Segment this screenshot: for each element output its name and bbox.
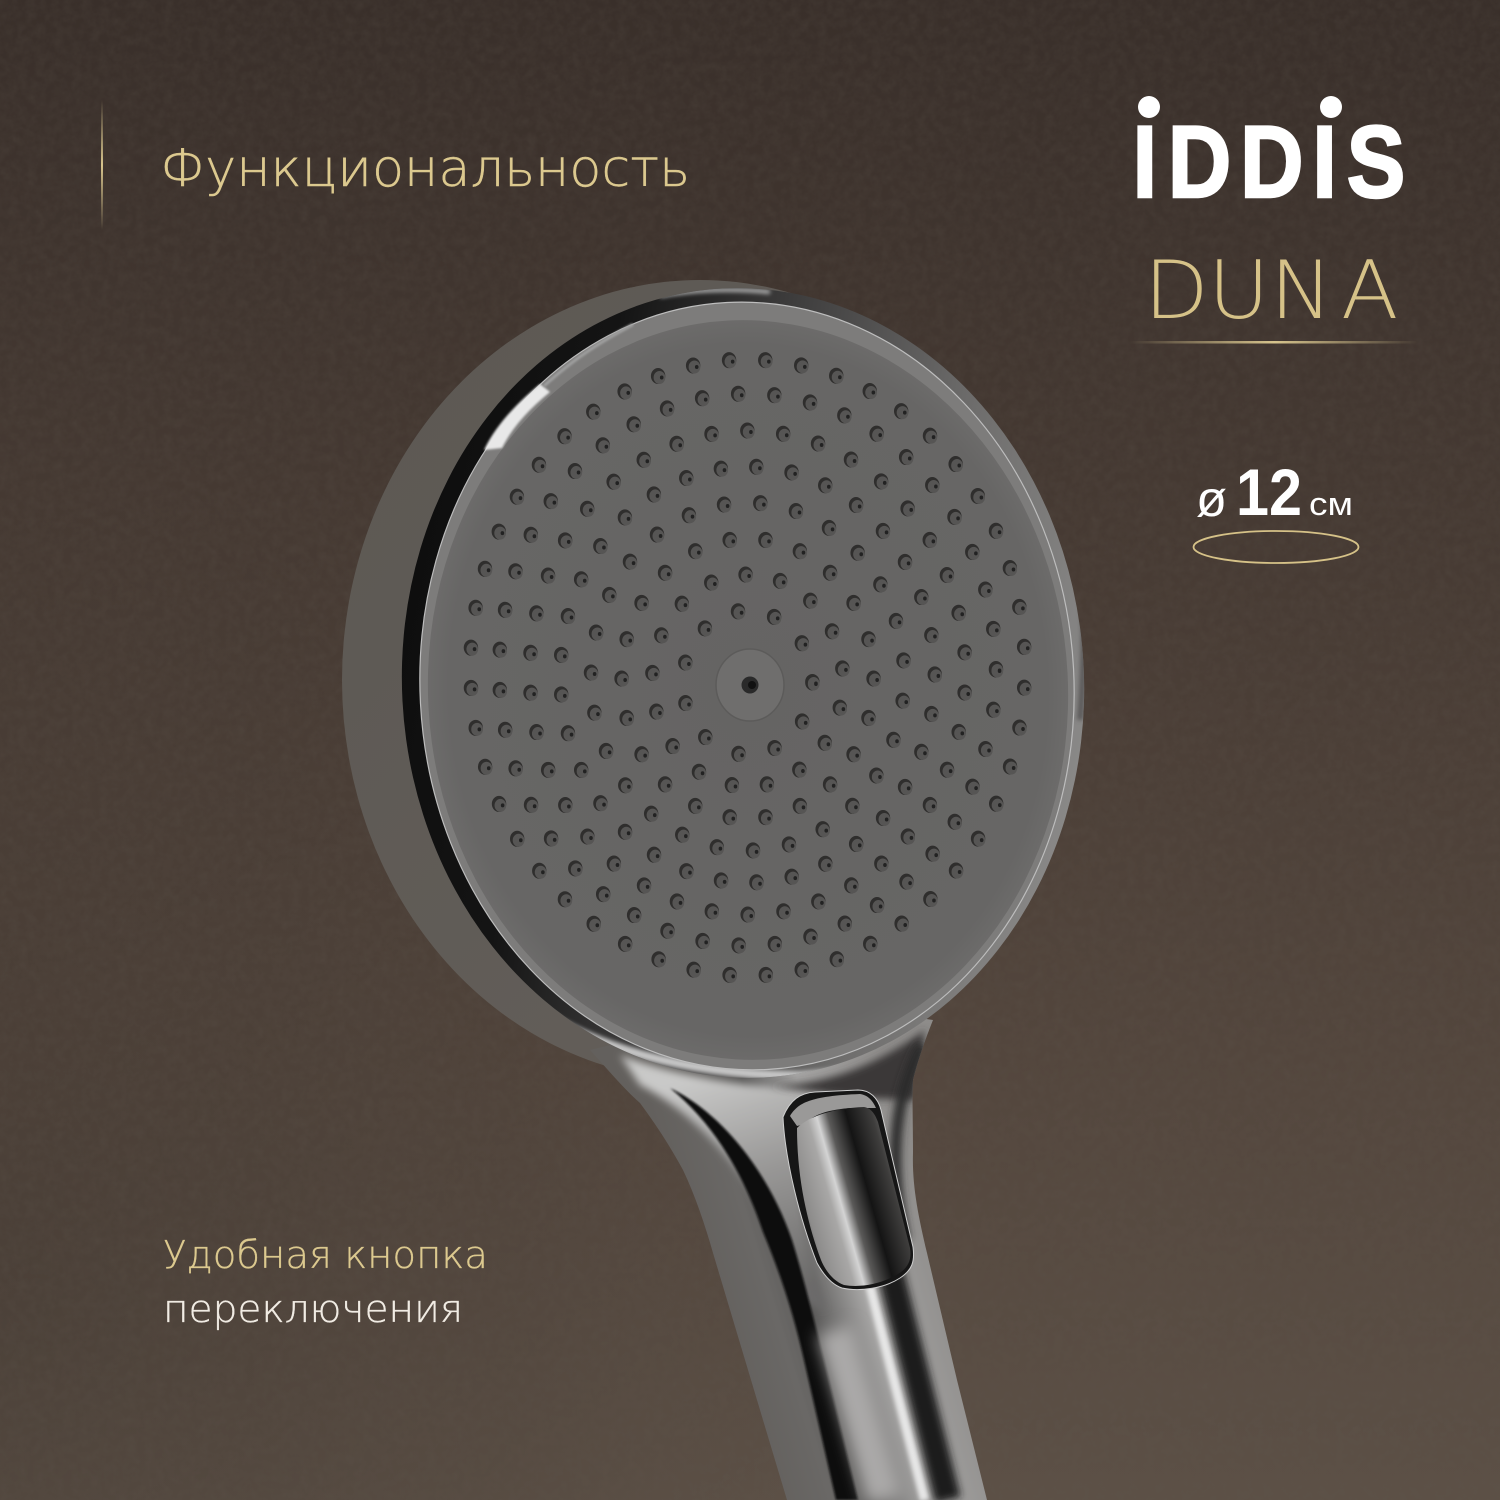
feature caption: переключения: [163, 1287, 463, 1331]
rim highlight: [484, 325, 632, 450]
feature caption: Удобная кнопка: [163, 1233, 488, 1277]
switch button: [783, 1090, 914, 1290]
handle: [604, 1019, 987, 1500]
accent line beside title: [101, 100, 103, 230]
head back body: [342, 280, 1058, 1080]
feature caption: [163, 1233, 488, 1331]
diameter label: см: [1309, 486, 1353, 522]
title: Функциональность: [160, 139, 690, 199]
center cap: [716, 649, 784, 721]
spray face: [409, 304, 1087, 1076]
model underline: [1130, 341, 1418, 344]
model name: DUNA: [1144, 245, 1398, 337]
diameter label: ø: [1196, 471, 1227, 527]
brand logo: IDDIS: [1133, 106, 1405, 220]
diameter ellipse icon: [1194, 531, 1358, 563]
diameter label: [1196, 455, 1353, 529]
spray nozzles: [470, 360, 1028, 977]
diameter label: 12: [1236, 455, 1302, 529]
chrome rim: [402, 288, 1084, 1078]
shower head: [342, 270, 1110, 1500]
face plate: [400, 285, 1094, 1087]
